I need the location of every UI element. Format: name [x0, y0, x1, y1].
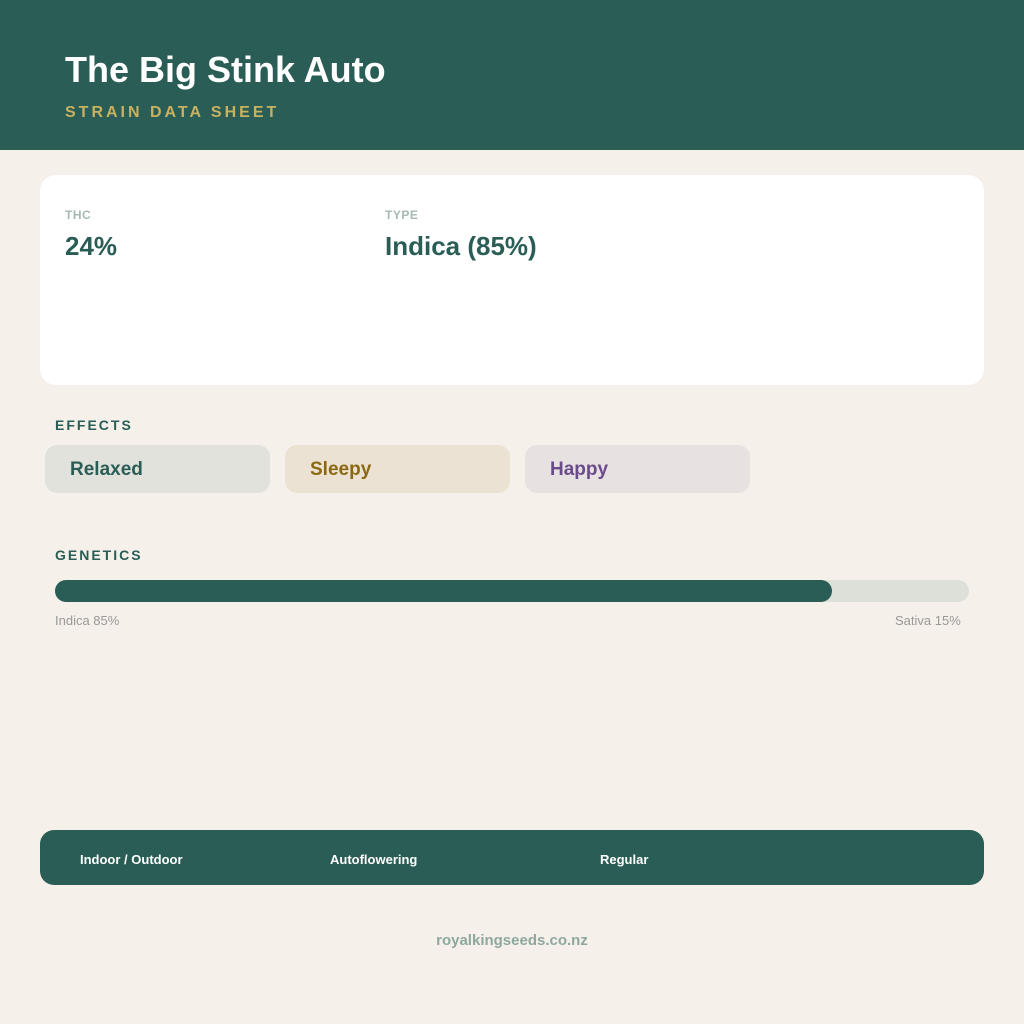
- heading: genetics: GENETICS: [55, 547, 143, 563]
- effect chip: relaxed: Relaxed: [70, 459, 143, 480]
- bar label: sativa: Sativa 15%: [895, 613, 961, 628]
- footer info bar: [40, 830, 984, 885]
- panel: key stats: [40, 175, 984, 385]
- subtitle: STRAIN DATA SHEET: [65, 104, 279, 121]
- effect chip: relaxed: [45, 445, 270, 493]
- header band: [0, 0, 1024, 150]
- info: grow environment: Indoor / Outdoor: [80, 852, 183, 867]
- title: The Big Stink Auto: [65, 49, 386, 90]
- stat label: THC: THC: [65, 208, 91, 222]
- stat label: type: TYPE: [385, 208, 418, 222]
- info: flowering type: Autoflowering: [330, 852, 417, 867]
- effect chip: happy: Happy: [550, 459, 608, 480]
- effect chip: sleepy: Sleepy: [310, 459, 371, 480]
- stat value: THC: 24%: [65, 231, 117, 261]
- source website: royalkingseeds.co.nz: [436, 932, 588, 949]
- genetics bar fill: indica 85%: [55, 580, 832, 602]
- stat value: type: Indica (85%): [385, 231, 537, 261]
- effect chip: sleepy: [285, 445, 510, 493]
- info: seed type: Regular: [600, 852, 648, 867]
- heading: effects: EFFECTS: [55, 417, 133, 433]
- genetics bar track: [55, 580, 969, 602]
- bar label: indica: Indica 85%: [55, 613, 119, 628]
- effect chip: happy: [525, 445, 750, 493]
